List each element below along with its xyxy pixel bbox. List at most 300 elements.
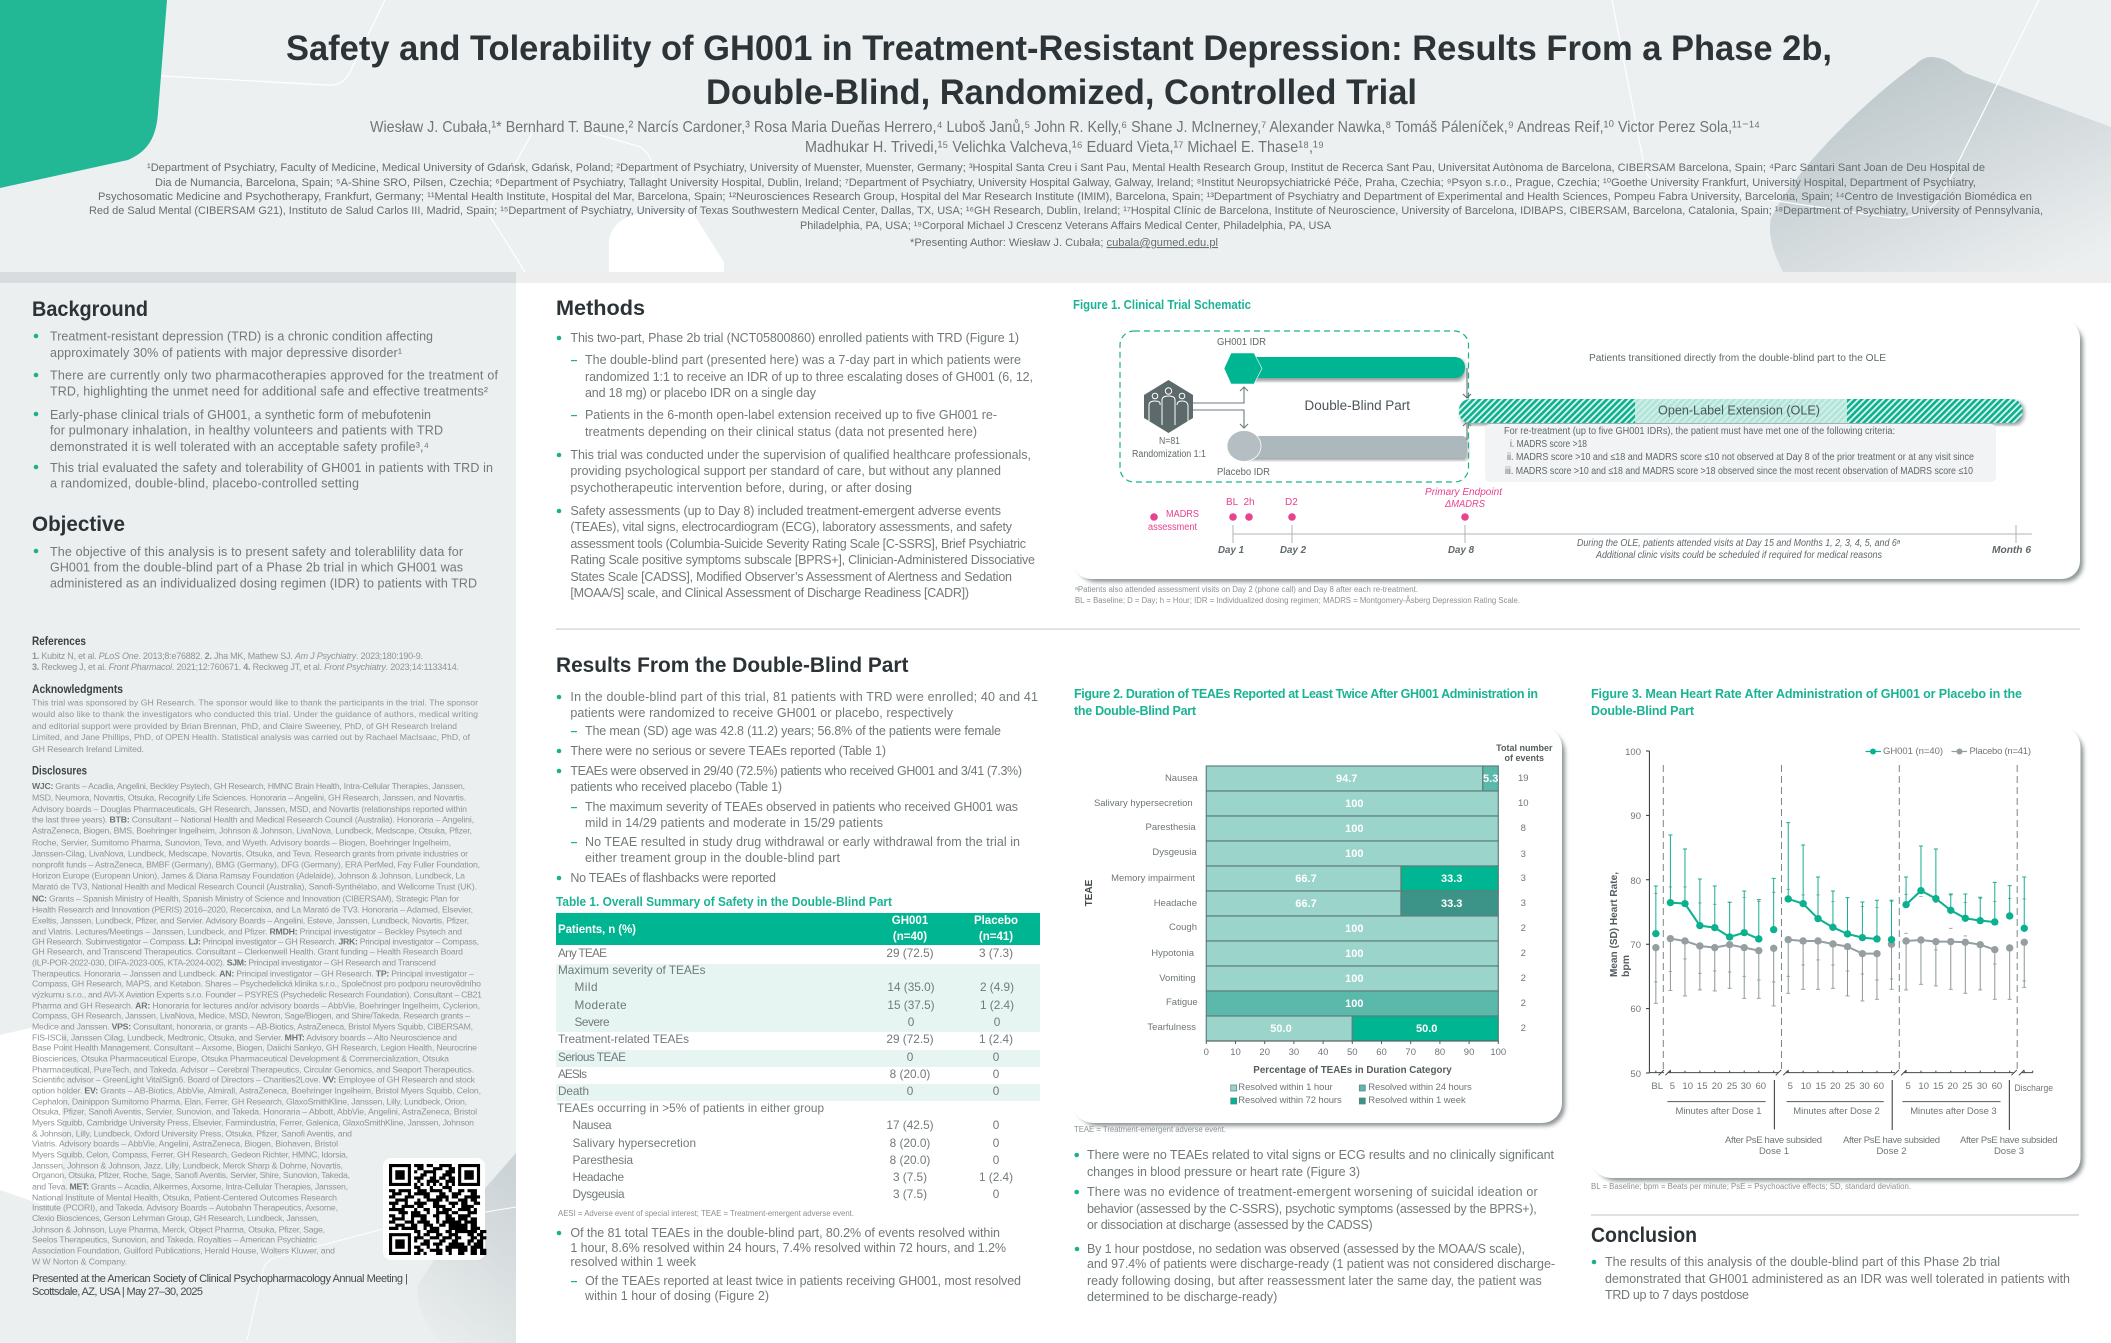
- y axis: 80: [1630, 876, 1641, 887]
- x axis: 70: [1405, 1047, 1416, 1058]
- x axis labels: 15: [1933, 1081, 1944, 1092]
- double-blind dashed box: [1120, 331, 1468, 482]
- acknowledgments: Acknowledgments: [32, 682, 123, 696]
- card: [1591, 727, 2084, 1181]
- x axis labels: 25: [1727, 1081, 1737, 1092]
- table row labels: Serious TEAE: [558, 1050, 626, 1064]
- y axis: 70: [1630, 940, 1641, 951]
- table GH001 values: 0: [907, 1084, 914, 1098]
- total events column: 2: [1521, 998, 1526, 1009]
- disclosures: Otsuka, Pfizer, Sanofi Aventis, Servier, Sunovion, and Takeda. Honoraria – Abbott, AbbVie, Angelini, AstraZeneca, Bristol: [32, 1106, 477, 1116]
- table row labels: Mild: [574, 980, 598, 994]
- text block: objective bullet: administered as an individualized dosing regimen (IDR) to patients with TRD: [50, 576, 477, 590]
- category labels: [1094, 773, 1198, 1033]
- text block: methods bullets: Safety assessments (up to Day 8) included treatment-emergent adverse events: [570, 504, 1001, 518]
- disclosures: Clexio Biosciences, Gerson Lehrman Group, GH Research, Lundbeck, Janssen,: [32, 1213, 319, 1223]
- text block: safety bullets: By 1 hour postdose, no sedation was observed (assessed by the MOAA/S scale),: [1087, 1242, 1525, 1256]
- retreatment criteria box: [1485, 424, 1996, 482]
- presented at note: Presented at the American Society of Clinical Psychopharmacology Annual Meeting |: [32, 1273, 408, 1285]
- left panel background: [0, 272, 2111, 1343]
- text block: results bullets: In the double-blind part of this trial, 81 patients with TRD were enrolled; 40 and 41: [570, 690, 1038, 704]
- timeline: [1148, 487, 2032, 561]
- text block: results bullets: TEAEs were observed in 29/40 (72.5%) patients who received GH001 and 3/41 (7.3%): [570, 764, 1022, 778]
- bar values: 100: [1345, 998, 1363, 1010]
- table row labels: Dysgeusia: [572, 1187, 625, 1201]
- text block: methods bullets: (TEAEs), vital signs, electrocardiogram (ECG), laboratory assessments, and safety: [570, 520, 1013, 534]
- table header: (n=40): [893, 931, 927, 943]
- timeline: 2h: [1244, 497, 1255, 508]
- affiliations: [89, 162, 2043, 249]
- disclosures: Viatris. Advisory boards – AbbVie, Angelini, AstraZeneca, Biogen, Biohaven, Bristol: [32, 1138, 338, 1148]
- retreatment criteria box: For re-treatment (up to five GH001 IDRs), the patient must have met one of the following criteria:: [1504, 426, 1895, 437]
- disclosures: NC: Grants – Spanish Ministry of Health, Spanish Ministry of Science and Innovation (CIBERSAM), Strategic Plan for: [32, 894, 459, 904]
- text block: methods bullets: psychotherapeutic intervention before, during, or after dosing: [570, 481, 912, 495]
- text block: background bullets: Treatment-resistant depression (TRD) is a chronic condition affecting: [50, 330, 433, 344]
- table GH001 values: [886, 946, 935, 1201]
- timeline: assessment: [1148, 522, 1197, 533]
- table GH001 values: 8 (20.0): [890, 1067, 930, 1081]
- disclosures: Advisory boards – Douglas Pharmaceuticals, GH Research, Janssen, MSD, and Novartis (relationships reported within: [32, 804, 467, 814]
- bar values: 33.3: [1441, 898, 1462, 910]
- x axis labels: 15: [1816, 1081, 1826, 1092]
- disclosures: National Institute of Mental Health, Otsuka, Patient-Centered Outcomes Research: [32, 1192, 337, 1202]
- total events column: [1496, 743, 1553, 1034]
- disclosures: GH Research, and Transcend Therapeutics. Consultant – Clerkenwell Health. Grant funding – Health Research Board: [32, 946, 463, 956]
- x axis: 0: [1204, 1047, 1209, 1058]
- text block: TEAE resolution bullets: Of the 81 total TEAEs in the double-blind part, 80.2% of events resolved within: [570, 1226, 1000, 1240]
- text block: methods bullets: This two-part, Phase 2b trial (NCT05800860) enrolled patients with TRD (Figure 1): [570, 331, 1019, 345]
- disclosures: nonprofit funds – AstraZeneca, BMBF (Germany), BMG (Germany), DFG (Germany), ERA PerMed, Fay Fuller Foundation,: [32, 860, 480, 870]
- total events column: 3: [1521, 873, 1526, 884]
- icon: patients hexagon: N=81: [1159, 436, 1180, 447]
- GH001 line: [1652, 887, 2028, 943]
- category labels: Salivary hypersecretion: [1094, 798, 1193, 809]
- y axis: 60: [1630, 1004, 1641, 1015]
- category labels: Hypotonia: [1151, 948, 1195, 959]
- text block: TEAE resolution bullets: resolved within 1 week: [570, 1255, 697, 1269]
- text block: results bullets: patients were randomized to receive GH001 or placebo, respectively: [570, 706, 954, 720]
- references: 3. Reckweg J, et al. Front Pharmacol. 2021;12:760671. 4. Reckweg JT, et al. Front Psychiatry. 2023;14:1133414.: [32, 662, 459, 672]
- text block: results bullets: No TEAEs of flashbacks were reported: [570, 871, 776, 885]
- GH001 IDR arm: [1217, 337, 1465, 384]
- acknowledgments: [31, 682, 478, 754]
- icon: patients hexagon: [1132, 380, 1206, 460]
- bar values: 5.3: [1483, 773, 1498, 785]
- disclosures: výzkumu s.r.o., and AVI-X Aviation Experts s.r.o. Founder – PSYRES (Psychedelic Research Foundation). Consultant – CB21: [32, 989, 482, 999]
- disclosures: Disclosures: [32, 764, 87, 778]
- references: References: [32, 634, 86, 648]
- text block: methods bullets: Rating Scale positive symptoms subscale [BPRS+], Clinician-Administered Dissociative: [570, 553, 1035, 567]
- x axis labels: Minutes after Dose 1: [1676, 1106, 1762, 1117]
- disclosures: and Viatris. Lectures/Meetings – Janssen, Lundbeck, and Pfizer. RMDH: Principal investigator – Beckley Psytech and: [32, 926, 462, 936]
- text block: safety bullets: or dissociation at discharge (assessed by the CADSS): [1087, 1218, 1373, 1232]
- table GH001 values: 8 (20.0): [890, 1136, 930, 1150]
- table row labels: Headache: [572, 1170, 624, 1184]
- heading: Background: Background: [32, 298, 148, 321]
- x axis labels: 5: [1670, 1081, 1675, 1092]
- presented at note: Scottsdale, AZ, USA | May 27–30, 2025: [32, 1286, 203, 1298]
- disclosures: Therapeutics. Honoraria – Janssen and Lundbeck. AN: Principal investigator – GH Research. TP: Principal investigator –: [32, 969, 474, 979]
- disclosures: Johnson & Johnson, Luye Pharma, Merck, Object Pharma, Otsuka, Pfizer, Sage,: [32, 1224, 325, 1234]
- disclosures: AstraZeneca, Biogen, BMS, Boehringer Ingelheim, Johnson & Johnson, LivaNova, Lundbeck, Medscape, Otsuka, Pfizer,: [32, 826, 472, 836]
- x axis labels: BL: [1651, 1081, 1663, 1092]
- x axis labels: 30: [1859, 1081, 1870, 1092]
- legend: [1231, 1082, 1472, 1106]
- total events column: 3: [1521, 898, 1526, 909]
- text block: results bullets: No TEAE resulted in study drug withdrawal or early withdrawal from the trial in: [585, 835, 1020, 849]
- affiliations: Psychosomatic Medicine and Psychotherapy, Frankfurt, Germany; ¹¹Mental Health Institute, Hospital del Mar, Barcelona, Spain; ¹²Neurosciences Research Group, Hospital del Mar Research Institute (IMIM), Barcelona, Spain; ¹³Department of Psychiatry and Department of Experimental and Health Sciences, Pompeu Fabra University, Barcelona, Spain; ¹⁴Centro de Investigación Biomédica en: [98, 191, 2032, 203]
- table GH001 values: 3 (7.5): [893, 1170, 927, 1184]
- table row labels: Any TEAE: [558, 946, 607, 960]
- text block: safety bullets: determined to be discharge-ready): [1087, 1290, 1277, 1304]
- table GH001 values: 8 (20.0): [890, 1153, 930, 1167]
- heading: Conclusion: Conclusion: [1591, 1224, 1697, 1247]
- text block: results bullets: either treament group in the double-blind part: [585, 851, 841, 865]
- table placebo values: 3 (7.3): [979, 946, 1013, 960]
- figure 1 footnotes: ᵃPatients also attended assessment visits on Day 2 (phone call) and Day 8 after each re-treatment.: [1075, 585, 1418, 594]
- disclosures: (ILP-POR-2022-030, DIFA-2023-005, KTA-2024-002). SJM: Principal investigator – GH Research and Transcend: [32, 958, 436, 968]
- text block: TEAE resolution bullets: 1 hour, 8.6% resolved within 24 hours, 7.4% resolved within 72 hours, and 1.2%: [570, 1241, 1006, 1255]
- table placebo values: 0: [993, 1187, 1000, 1201]
- disclosures: Myers Squibb, Cambridge University Press, Elsevier, Farmindustria, Ferrer, Galenica, GlaxoSmithKline, Janssen, Johnson: [32, 1118, 474, 1128]
- references: [32, 634, 459, 672]
- bar values: 33.3: [1441, 873, 1462, 885]
- text block: conclusion bullet: [1592, 1255, 2070, 1302]
- text block: results bullets: The maximum severity of TEAEs observed in patients who received GH001 was: [585, 800, 1018, 814]
- text block: background bullets: demonstrated it is well tolerated with an acceptable safety profile³,⁴: [50, 440, 429, 454]
- retreatment criteria box: iii. MADRS score >10 and ≤18 and MADRS score >18 observed since the most recent observation of MADRS score ≤10: [1505, 466, 1973, 477]
- x axis labels: 10: [1682, 1081, 1693, 1092]
- x axis labels: 20: [1830, 1081, 1841, 1092]
- open-label extension bar: Open-Label Extension (OLE): [1658, 404, 1820, 418]
- x axis labels: 25: [1962, 1081, 1973, 1092]
- total events column: of events: [1505, 753, 1544, 763]
- bar values: 100: [1345, 973, 1363, 985]
- text block: results bullets: There were no serious or severe TEAEs reported (Table 1): [570, 744, 886, 758]
- text block: safety bullets: There were no TEAEs related to vital signs or ECG results and no clinically significant: [1087, 1148, 1555, 1162]
- total events column: 2: [1521, 973, 1526, 984]
- table placebo values: 0: [993, 1067, 1000, 1081]
- bar values: 100: [1345, 848, 1363, 860]
- y axis: [1608, 747, 1649, 1080]
- placebo IDR arm: Placebo IDR: [1217, 467, 1270, 478]
- affiliations: *Presenting Author: Wiesław J. Cubała; cubala@gumed.edu.pl: [910, 237, 1218, 249]
- x axis labels: 25: [1845, 1081, 1855, 1092]
- disclosures: Scientific advisor – GreenLight VitalSign6. Board of Directors – Charities2Love. VV: Employee of GH Research and stock: [32, 1075, 476, 1085]
- total events column: 19: [1518, 773, 1529, 784]
- bar values: 66.7: [1295, 898, 1317, 910]
- affiliations: Red de Salud Mental (CIBERSAM G21), Instituto de Salud Carlos III, Madrid, Spain; ¹⁵Department of Psychiatry, University of Texas Southwestern Medical Center, Dallas, TX, USA; ¹⁶GH Research, Dublin, Ireland; ¹⁷Hospital Clínic de Barcelona, Institute of Neuroscience, University of Barcelona, IDIBAPS, CIBERSAM, Barcelona, Catalonia, Spain; ¹⁸Department of Psychiatry, University of Pennsylvania,: [89, 205, 2043, 217]
- open-label extension bar: [1459, 399, 2024, 425]
- placebo line: [1652, 935, 2028, 957]
- x axis: 20: [1259, 1047, 1270, 1058]
- x axis labels: [1651, 1081, 2058, 1157]
- legend: [1866, 746, 2031, 757]
- x axis labels: After PsE have subsided: [1725, 1135, 1822, 1146]
- text block: objective bullet: [34, 545, 477, 590]
- affiliations: Dia de Numancia, Barcelona, Spain; ⁵A-Shine SRO, Pilsen, Czechia; ⁶Department of Psychiatry, Tallaght University Hospital, Dublin, Ireland; ⁷Department of Psychiatry, University Hospital Galway, Galway, Ireland; ⁸Institut Neuropsychiatrické Péče, Praha, Czechia; ⁹Psyon s.r.o., Prague, Czechia; ¹⁰Goethe University Frankfurt, University Hospital, Department of Psychiatry,: [155, 177, 1976, 189]
- figure 3 title: [1591, 687, 2022, 718]
- category labels: Tearfulness: [1147, 1022, 1196, 1033]
- legend: Resolved within 1 week: [1368, 1095, 1466, 1106]
- bar values: 100: [1345, 923, 1363, 935]
- disclosures: GH Research. Subinvestigator – Compass. LJ: Principal investigator – GH Research. JRK: Principal investigator – Compass,: [32, 936, 479, 946]
- card: [1073, 320, 2083, 582]
- affiliations: ¹Department of Psychiatry, Faculty of Medicine, Medical University of Gdańsk, Gdańsk, Poland; ²Department of Psychiatry, University of Muenster, Muenster, Germany; ³Hospital Santa Creu i Sant Pau, Mental Health Research Group, Institut de Recerca Sant Pau, Universitat Autònoma de Barcelona, CIBERSAM Barcelona, Spain; ⁴Parc Santari Sant Joan de Deu Hospital de: [147, 162, 1985, 174]
- category labels: Memory impairment: [1111, 873, 1195, 884]
- acknowledgments: and editorial support were provided by Brian Brennan, PhD, and Claire Sweeney, PhD, of GH Research Ireland: [32, 721, 457, 731]
- heading: Results: Results From the Double-Blind Part: [556, 654, 908, 677]
- text block: background bullets: for pulmonary inhalation, in healthy volunteers and patients with TRD: [50, 424, 443, 438]
- text block: background bullets: a randomized, double-blind, placebo-controlled setting: [50, 477, 359, 491]
- x axis labels: Dose 1: [1759, 1146, 1789, 1157]
- disclosures: Compass, GH Research, MAPS, and Ketabon. Shares – Psychedelická klinika s.r.o., Společnost pro podporu neurovědního: [32, 979, 481, 989]
- disclosures: Myers Squibb, Celon, Compass, Ferrer, GH Research, Gedeon Richter, HMNC, Idorsia,: [32, 1149, 348, 1159]
- figure 2 title: the Double-Blind Part: [1074, 704, 1197, 718]
- header background: [0, 0, 2111, 272]
- text block: background bullets: [34, 330, 499, 491]
- table placebo values: 0: [994, 1015, 1001, 1029]
- y axis title: TEAE: [1084, 879, 1095, 906]
- figure 3 title: Double-Blind Part: [1591, 704, 1695, 718]
- table header: GH001: [892, 915, 929, 927]
- text block: results bullets: mild in 14/29 patients and moderate in 15/29 patients: [585, 816, 883, 830]
- disclosures: WJC: Grants – Acadia, Angelini, Beckley Psytech, GH Research, HMNC Brain Health, Intra-Cellular Therapies, Janssen,: [32, 781, 465, 791]
- disclosures: Association Foundation, Guilford Publications, Herald House, Wolters Kluwer, and: [32, 1246, 335, 1256]
- table header: Patients, n (%): [558, 924, 636, 936]
- text block: safety bullets: and 97.4% of patients were discharge-ready (1 patient was not considered discharge-: [1087, 1257, 1555, 1271]
- acknowledgments: GH Research Ireland Limited.: [32, 744, 144, 754]
- table GH001 values: 0: [907, 1050, 914, 1064]
- timeline: Day 8: [1448, 545, 1474, 556]
- authors: Madhukar H. Trivedi,¹⁵ Velichka Valcheva,¹⁶ Eduard Vieta,¹⁷ Michael E. Thase¹⁸,¹⁹: [805, 139, 1324, 156]
- category labels: Headache: [1154, 898, 1197, 909]
- total events column: Total number: [1496, 743, 1553, 753]
- disclosures: [32, 764, 482, 1266]
- disclosures: Medice and Janssen. VPS: Consultant, honoraria, or grants – AB-Biotics, AstraZeneca, Bristol Myers Squibb, CIBERSAM,: [32, 1022, 473, 1032]
- x axis labels: 10: [1918, 1081, 1929, 1092]
- category labels: Nausea: [1165, 773, 1198, 784]
- category labels: Dysgeusia: [1152, 847, 1197, 858]
- table header: Placebo: [974, 915, 1018, 927]
- bar values: 66.7: [1295, 873, 1317, 885]
- text block: background bullets: TRD, highlighting the unmet need for additional safe and effective treatments²: [50, 385, 488, 399]
- x axis: 10: [1230, 1047, 1241, 1058]
- legend: Resolved within 1 hour: [1238, 1082, 1333, 1093]
- title: [286, 29, 1832, 112]
- x axis labels: 60: [1873, 1081, 1884, 1092]
- table GH001 values: 15 (37.5): [887, 998, 935, 1012]
- disclosures: Base Point Health Management. Consultant – Axsome, Biogen, Daiichi Sankyo, GH Research, Legion Health, Neurocrine: [32, 1042, 477, 1052]
- text block: methods bullets: providing psychological support per standard of care, but without any planned: [570, 464, 1001, 478]
- x axis labels: Dose 3: [1994, 1146, 2024, 1157]
- data series: [1652, 823, 2028, 1006]
- timeline: Day 1: [1218, 545, 1244, 556]
- disclosures: Janssen-Cilag, LivaNova, Lundbeck, Medscape, Novartis, Otsuka, and Teva. Research grants from private industries or: [32, 848, 468, 858]
- table placebo values: 0: [993, 1118, 1000, 1132]
- table placebo values: 1 (2.4): [980, 998, 1014, 1012]
- x axis labels: After PsE have subsided: [1960, 1135, 2058, 1146]
- x axis labels: 30: [1741, 1081, 1751, 1092]
- dose dashed separators: [1663, 765, 2017, 1070]
- text block: methods bullets: and 18 mg) or placebo IDR on a single day: [585, 386, 817, 400]
- x axis labels: 60: [1992, 1081, 2002, 1092]
- bar values: 100: [1345, 948, 1363, 960]
- card: [1073, 727, 1565, 1126]
- x axis labels: 30: [1977, 1081, 1987, 1092]
- x axis: 80: [1435, 1047, 1445, 1058]
- table footnote: AESI = Adverse event of special interest; TEAE = Treatment-emergent adverse event.: [558, 1209, 854, 1218]
- bar values: 100: [1345, 823, 1363, 835]
- text block: methods bullets: randomized 1:1 to receive an IDR of up to three escalating doses of GH001 (6, 12,: [585, 370, 1033, 384]
- table row labels: Paresthesia: [572, 1153, 633, 1167]
- table row labels: Treatment-related TEAEs: [558, 1032, 689, 1046]
- GH001 error bars: [1654, 823, 2026, 940]
- text block: methods bullets: treatments depending on their clinical status (data not presented here): [585, 425, 977, 439]
- text block: background bullets: Early-phase clinical trials of GH001, a synthetic form of mebufotenin: [50, 408, 431, 422]
- x axis: 50: [1347, 1047, 1358, 1058]
- legend: Resolved within 24 hours: [1368, 1082, 1472, 1093]
- table row labels: Salivary hypersecretion: [572, 1136, 696, 1150]
- bar values: 50.0: [1416, 1023, 1437, 1035]
- table shaded rows: [556, 964, 1040, 1101]
- text block: methods bullets: [557, 331, 1035, 600]
- figure 1 title: Figure 1. Clinical Trial Schematic: [1073, 298, 1251, 312]
- authors: [370, 118, 1760, 156]
- y axis: 90: [1630, 811, 1641, 822]
- table row labels: Maximum severity of TEAEs: [558, 963, 706, 977]
- y axis: bpm: [1620, 955, 1632, 977]
- x axis labels: 10: [1801, 1081, 1811, 1092]
- acknowledgments: would also like to thank the investigators who conducted this trial. Under the guidance of authors, medical writing: [31, 709, 478, 719]
- x axis labels: 15: [1697, 1081, 1707, 1092]
- disclosures: Organon, Otsuka, Pfizer, Roche, Sage, Sanofi Aventis, Servier, Shire, Sunovion, Takeda,: [32, 1170, 350, 1180]
- y axis: 100: [1625, 747, 1641, 758]
- icon: QR code: [383, 1158, 486, 1260]
- table row labels: [557, 946, 824, 1201]
- arrows: arms to OLE: [1463, 368, 1471, 440]
- retreatment criteria box: ii. MADRS score >10 and ≤18 and MADRS score ≤10 not observed at Day 8 of the prior treatment or at any visit since: [1507, 452, 1974, 463]
- timeline: BL: [1226, 497, 1239, 508]
- decorative green corner shape: [0, 0, 167, 188]
- table GH001 values: 17 (42.5): [886, 1118, 934, 1132]
- table row labels: Severe: [574, 1015, 610, 1029]
- timeline: Month 6: [1992, 545, 2031, 556]
- label: direct transition: Patients transitioned directly from the double-blind part to the OLE: [1589, 353, 1886, 364]
- x axis labels: 20: [1712, 1081, 1722, 1092]
- x axis labels: Discharge: [2014, 1083, 2053, 1094]
- category labels: Vomiting: [1159, 973, 1196, 984]
- text block: methods bullets: The double-blind part (presented here) was a 7-day part in which patients were: [585, 353, 1021, 367]
- text block: methods bullets: assessment tools (Columbia-Suicide Severity Rating Scale [C-SSRS], Brief Psychiatric: [570, 537, 1026, 551]
- disclosures: MSD, Neumora, Novartis, Otsuka, Recognify Life Sciences. Honoraria – Angelini, GH Research, Janssen, and Novartis.: [32, 792, 466, 802]
- x axis: [1649, 1070, 2033, 1130]
- figure 2: stacked bar chart: [1073, 727, 1565, 1126]
- title: Safety and Tolerability of GH001 in Treatment-Resistant Depression: Results From a Phase 2b,: [286, 29, 1832, 68]
- text block: safety bullets: behavior (assessed by the C-SSRS), psychotic symptoms (assessed by the BPRS+),: [1087, 1202, 1537, 1216]
- table GH001 values: 29 (72.5): [886, 946, 934, 960]
- text block: methods bullets: States Scale [CADSS], Modified Observer’s Assessment of Alertness and Sedation: [570, 570, 1012, 584]
- disclosures: Compass, GH Research, Janssen, LivaNova, Medice, MSD, Newron, Sage/Biogen, and Shire/Takeda. Research grants –: [32, 1010, 470, 1020]
- text block: results bullets: patients who received placebo (Table 1): [570, 780, 782, 794]
- x axis: [1204, 1041, 1506, 1076]
- category labels: Fatigue: [1166, 997, 1198, 1008]
- disclosures: Health Research and Innovation (PERIS) 2016–2020, Recercaixa, and La Marató de TV3. Honoraria – Adamed, Elsevier,: [32, 905, 473, 915]
- y axis: Mean (SD) Heart Rate,: [1608, 872, 1620, 977]
- presented at note: [32, 1273, 408, 1298]
- placebo error bars: [1654, 887, 2026, 1006]
- conclusion divider: [1591, 1214, 2079, 1216]
- table GH001 values: 14 (35.0): [887, 980, 935, 994]
- placebo IDR arm: [1217, 430, 1467, 478]
- affiliations: Philadelphia, PA, USA; ¹⁹Corporal Michael J Crescenz Veterans Affairs Medical Center, Philadelphia, PA, USA: [800, 220, 1332, 232]
- bar values: 100: [1345, 798, 1363, 810]
- table row labels: TEAEs occurring in >5% of patients in either group: [557, 1101, 824, 1115]
- text block: results bullets: [557, 690, 1038, 885]
- table GH001 values: 0: [908, 1015, 915, 1029]
- text block: background bullets: There are currently only two pharmacotherapies approved for the treatment of: [50, 368, 499, 382]
- heading: Objective: Objective: [32, 513, 125, 536]
- disclosures: the last three years). BTB: Consultant – National Health and Medical Research Council (Australia). Honoraria – Angelini,: [32, 814, 474, 824]
- x axis labels: 60: [1756, 1081, 1766, 1092]
- bars: [1206, 766, 1498, 1041]
- total events column: 10: [1518, 798, 1529, 809]
- table placebo values: 0: [993, 1136, 1000, 1150]
- x axis labels: Minutes after Dose 3: [1910, 1106, 1997, 1117]
- GH001 IDR arm: GH001 IDR: [1217, 337, 1266, 348]
- table 1: [556, 913, 1040, 1201]
- disclosures: Marató de TV3, National Health and Medical Research Council (Australia), Sanofi-Synthélabo, and Wellcome Trust (UK).: [32, 881, 477, 891]
- table GH001 values: 29 (72.5): [886, 1032, 934, 1046]
- section divider: [556, 628, 2080, 630]
- text block: TEAE resolution bullets: [557, 1226, 1021, 1303]
- text block: background bullets: approximately 30% of patients with major depressive disorder¹: [50, 346, 402, 360]
- disclosures: Cephalon, Dainippon Sumitomo Pharma, Elan, Ferrer, GH Research, GlaxoSmithKline, Janssen, Lilly, Lundbeck, Orion,: [32, 1096, 467, 1106]
- figure 1 footnotes: [1075, 585, 1520, 605]
- text block: methods bullets: [MOAA/S] scale, and Clinical Assessment of Discharge Readiness [CADR]): [570, 586, 969, 600]
- text block: methods bullets: Patients in the 6-month open-label extension received up to five GH001 re-: [585, 408, 997, 422]
- references: 1. Kubitz N, et al. PLoS One. 2013;8:e76882. 2. Jha MK, Mathew SJ. Am J Psychiatry. 2023;180:190-9.: [32, 651, 423, 661]
- table placebo values: 1 (2.4): [979, 1170, 1013, 1184]
- timeline: Day 2: [1280, 545, 1306, 556]
- table row labels: Moderate: [574, 998, 627, 1012]
- acknowledgments: This trial was sponsored by GH Research. The sponsor would like to thank the participants in the trial. The sponsor: [32, 698, 478, 708]
- table row labels: AESIs: [558, 1067, 587, 1081]
- figure 2 title: Figure 2. Duration of TEAEs Reported at Least Twice After GH001 Administration in: [1074, 687, 1538, 701]
- figure 2 footnote: TEAE = Treatment-emergent adverse event.: [1074, 1125, 1226, 1134]
- y axis: 50: [1630, 1069, 1641, 1080]
- icon: patients hexagon: Randomization 1:1: [1132, 449, 1206, 460]
- table placebo values: [979, 946, 1014, 1201]
- x axis labels: 5: [1905, 1081, 1911, 1092]
- heading: Methods: Methods: [556, 297, 645, 320]
- text block: TEAE resolution bullets: Of the TEAEs reported at least twice in patients receiving GH001, most resolved: [585, 1274, 1021, 1288]
- timeline: During the OLE, patients attended visits at Day 15 and Months 1, 2, 3, 4, 5, and 6ᵃ: [1577, 538, 1900, 549]
- table placebo values: 2 (4.9): [980, 980, 1014, 994]
- disclosures: Exeltis, Janssen, Lundbeck, Pfizer, and Servier. Advisory Boards – Angelini, Esteve, Janssen, Lundbeck, Novartis, Pfizer,: [32, 916, 469, 926]
- disclosures: Pharma and GH Research. AR: Honoraria for lectures and/or advisory boards – AbbVie, Boehringer Ingelheim, Cyclerion,: [32, 1000, 480, 1010]
- table placebo values: 0: [993, 1050, 1000, 1064]
- figure 2 title: [1074, 687, 1538, 718]
- figure 3: heart rate line chart: [1591, 727, 2084, 1181]
- x axis: 60: [1376, 1047, 1387, 1058]
- x axis: 30: [1289, 1047, 1299, 1058]
- disclosures: FIS-ISCiii, Janssen Cilag, Lundbeck, Medtronic, Otsuka, and Servier. MHT: Advisory boards – Alto Neuroscience and: [32, 1032, 457, 1042]
- acknowledgments: Limited, and Jane Phillips, PhD, of OPEN Health. Statistical analysis was carried out by Rachael MacIsaac, PhD, of: [32, 732, 471, 742]
- disclosures: Roche, Servier, Sumitomo Pharma, Sunovion, Teva, and Wyeth. Advisory boards – Biogen, Boehringer Ingelheim,: [32, 837, 451, 847]
- text block: conclusion bullet: The results of this analysis of the double-blind part of this Phase 2b trial: [1605, 1255, 2000, 1269]
- legend: Placebo (n=41): [1970, 746, 2031, 757]
